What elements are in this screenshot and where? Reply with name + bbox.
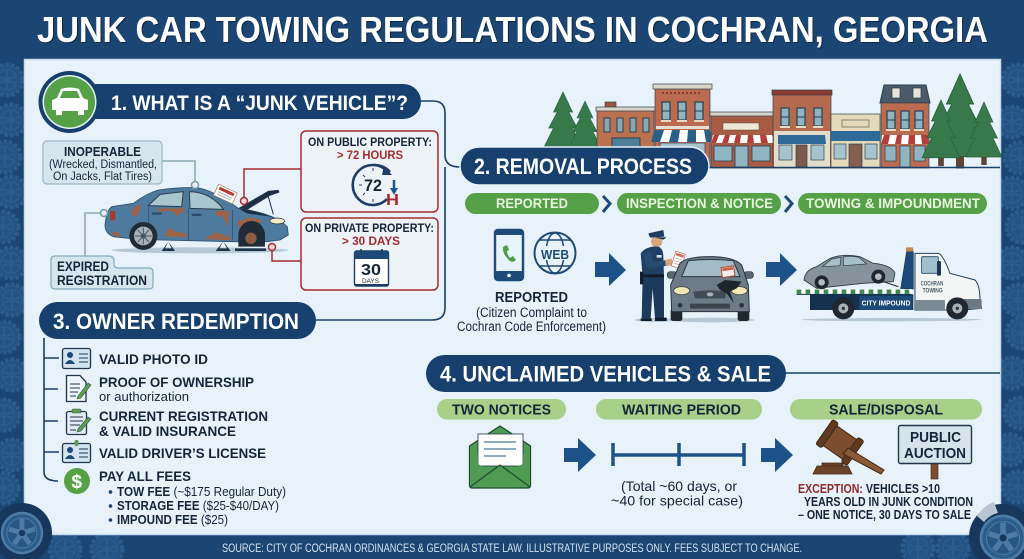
item: valid photo id: VALID PHOTO ID — [99, 351, 208, 367]
callout: inoperable: On Jacks, Flat Tires) — [53, 171, 152, 183]
item: pay all fees: TOW FEE (~$175 Regular Duty) — [117, 485, 286, 499]
exception note: YEARS OLD IN JUNK CONDITION — [804, 495, 973, 509]
icon: 30-day calendar — [354, 249, 388, 286]
waiting period text — [611, 478, 743, 508]
damaged car front — [667, 257, 755, 322]
icon: envelope with notice — [470, 426, 530, 488]
trees right — [922, 74, 1002, 168]
section 2: removal process — [457, 147, 987, 334]
timeline — [613, 443, 744, 466]
callout: inoperable: INOPERABLE — [64, 145, 141, 159]
private property box: ON PRIVATE PROPERTY: — [305, 221, 434, 235]
police officer — [635, 230, 685, 322]
exception note: – ONE NOTICE, 30 DAYS TO SALE — [798, 508, 971, 522]
icon: 72-hour clock: 72 — [364, 176, 382, 195]
storefront building F — [880, 85, 930, 168]
corner tire left — [0, 503, 52, 559]
heading 3: 3. OWNER REDEMPTION — [53, 309, 299, 334]
public auction sign: PUBLIC — [910, 429, 961, 446]
storefront building E — [831, 114, 880, 168]
item: valid drivers license — [62, 440, 266, 462]
item: valid drivers license: VALID DRIVER’S LICENSE — [99, 445, 266, 461]
trees left — [544, 92, 601, 155]
heading 2 — [460, 147, 709, 185]
storefront building A — [596, 102, 655, 168]
exception note: EXCEPTION: VEHICLES >10 — [798, 482, 940, 496]
item: pay all fees — [64, 468, 286, 527]
arrow 2 — [766, 253, 797, 286]
corner tire right — [969, 502, 1024, 559]
junk car illustration — [105, 184, 288, 253]
reported text: Cochran Code Enforcement) — [457, 319, 606, 334]
waiting period text: ~40 for special case) — [611, 492, 743, 508]
section connector lines — [316, 101, 1000, 373]
callout: expired registration: EXPIRED — [57, 259, 109, 274]
icon: phone — [495, 230, 523, 280]
heading 2: 2. REMOVAL PROCESS — [474, 154, 692, 179]
step pills: REPORTED — [496, 195, 568, 211]
heading 1 — [38, 71, 421, 133]
callout: expired registration: REGISTRATION — [57, 273, 147, 288]
heading 4: 4. UNCLAIMED VEHICLES & SALE — [440, 362, 771, 386]
red connector lines — [240, 169, 301, 261]
public auction sign — [898, 426, 972, 479]
heading 4 — [426, 355, 786, 392]
public property box: > 72 HOURS — [337, 148, 403, 162]
exception note — [798, 482, 973, 522]
reported text: (Citizen Complaint to — [476, 305, 587, 320]
reported text — [457, 290, 606, 334]
public property box: ON PUBLIC PROPERTY: — [308, 135, 432, 149]
step pills: WAITING PERIOD — [622, 402, 741, 418]
tow truck: COCHRAN — [921, 281, 944, 288]
section 1: what is a junk vehicle — [38, 71, 438, 290]
icon: 72-hour clock: H — [386, 192, 399, 209]
callout: inoperable: (Wrecked, Dismantled, — [49, 159, 157, 171]
icon: 72-hour clock — [353, 165, 399, 209]
ground line — [700, 166, 1000, 168]
step pills — [465, 193, 987, 214]
step pills: TWO NOTICES — [452, 402, 551, 418]
checklist tree line — [44, 338, 59, 481]
item: current registration and insurance: & VALID INSURANCE — [99, 423, 236, 439]
step pills: SALE/DISPOSAL — [829, 402, 943, 418]
arrow 4 — [761, 438, 793, 472]
item: pay all fees: $ — [72, 472, 82, 493]
item: pay all fees: STORAGE FEE ($25-$40/DAY) — [117, 499, 279, 513]
private property box: > 30 DAYS — [342, 234, 400, 248]
source footer: SOURCE: CITY OF COCHRAN ORDINANCES & GEORGIA STATE LAW. ILLUSTRATIVE PURPOSES ONLY. FEES SUBJECT TO CHANGE. — [222, 543, 802, 555]
step pills: INSPECTION & NOTICE — [626, 195, 773, 211]
icon: 30-day calendar: 30 — [361, 262, 381, 279]
section 3: owner redemption — [39, 302, 316, 527]
callout: inoperable — [43, 141, 195, 185]
public property box — [301, 131, 438, 212]
public auction sign: AUCTION — [904, 445, 966, 462]
item: proof of ownership: or authorization — [99, 390, 189, 404]
callout: expired registration — [51, 213, 153, 289]
section 4: unclaimed vehicles and sale — [426, 355, 982, 522]
icon: 30-day calendar: DAYS — [362, 279, 379, 285]
waiting period text: (Total ~60 days, or — [621, 478, 737, 494]
tow truck: CITY IMPOUND — [862, 300, 910, 307]
heading 1: 1. WHAT IS A “JUNK VEHICLE”? — [111, 91, 408, 115]
storefront building D — [772, 90, 832, 168]
town illustration — [544, 74, 1002, 168]
storefront building C — [710, 112, 775, 168]
reported text: REPORTED — [495, 290, 568, 306]
tow truck: TOWING — [923, 287, 943, 294]
tow truck — [797, 247, 982, 321]
item: valid photo id — [62, 348, 208, 368]
item: proof of ownership: PROOF OF OWNERSHIP — [99, 374, 254, 390]
private property box — [301, 218, 438, 290]
icon: gavel — [813, 419, 884, 474]
arrow 1 — [595, 253, 626, 286]
icon: web globe — [534, 232, 576, 274]
step pills: TOWING & IMPOUNDMENT — [806, 195, 980, 211]
step pills — [437, 399, 982, 420]
icon: web globe: WEB — [541, 247, 569, 262]
item: proof of ownership — [66, 374, 254, 404]
item: current registration and insurance: CURRENT REGISTRATION — [99, 408, 268, 424]
callout dots — [100, 182, 198, 216]
storefront building B — [651, 84, 714, 168]
item: current registration and insurance — [66, 408, 268, 439]
heading 3 — [39, 302, 316, 339]
item: pay all fees: IMPOUND FEE ($25) — [117, 513, 228, 527]
item: pay all fees: PAY ALL FEES — [99, 468, 191, 484]
arrow 3 — [564, 438, 596, 472]
